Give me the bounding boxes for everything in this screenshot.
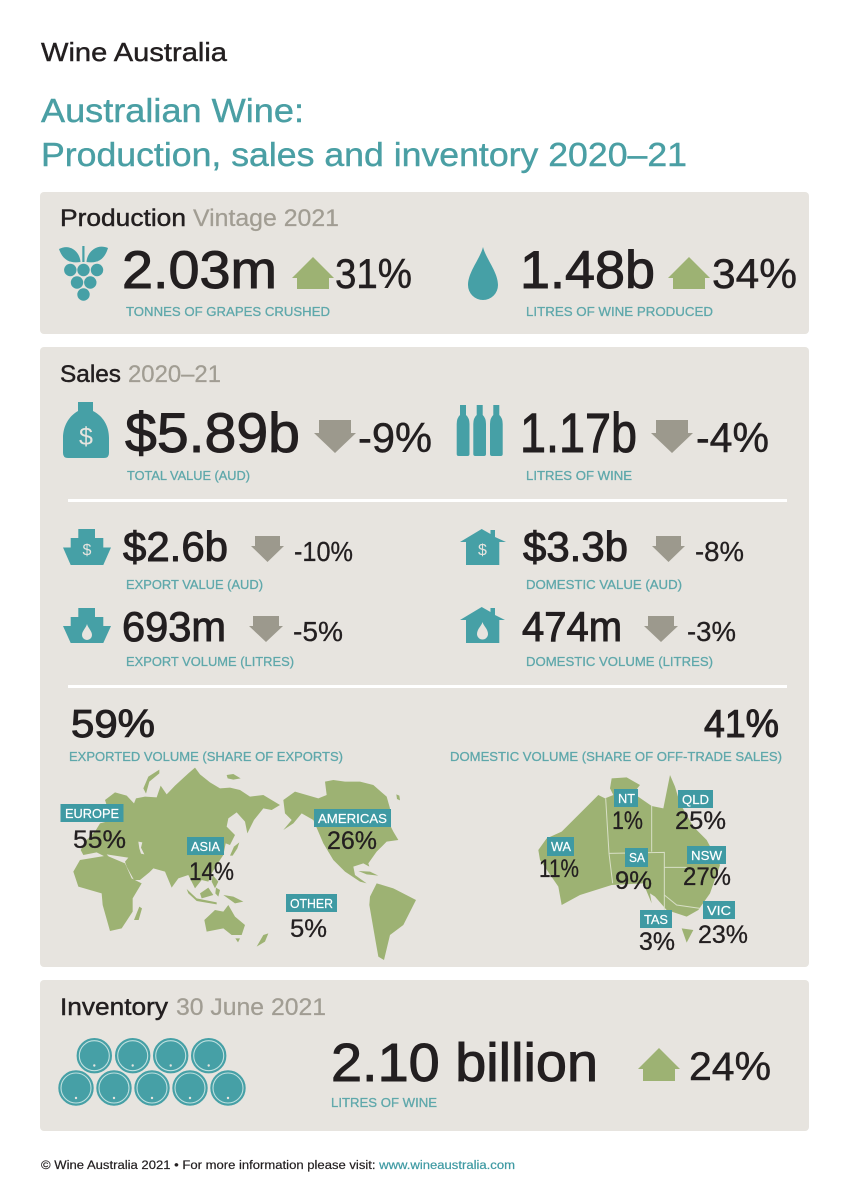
- stat: exported share: 59%: [71, 703, 155, 746]
- label: NT: 1%: [612, 807, 643, 835]
- stat: domestic value: [523, 523, 744, 592]
- sales heading: [60, 361, 221, 388]
- icon: house with drop: [460, 607, 505, 643]
- stat: domestic volume: 474m: [522, 603, 622, 650]
- label: Europe: [60, 804, 126, 854]
- stat: inventory litres: LITRES OF WINE: [331, 1095, 437, 1110]
- icon: money bag: $: [79, 423, 93, 451]
- icon: ship with dollar: $: [83, 542, 92, 559]
- inventory heading: 30 June 2021: [176, 994, 326, 1021]
- label: TAS: [639, 910, 675, 956]
- stat: litres of wine: 1.17b: [520, 401, 637, 464]
- icon: grapes: [59, 246, 108, 301]
- production heading: Vintage 2021: [193, 205, 339, 232]
- arrow down: [651, 420, 693, 453]
- stat: litres of wine: LITRES OF WINE: [526, 468, 632, 483]
- world map: [73, 768, 416, 960]
- label: Asia: ASIA: [191, 839, 220, 854]
- stat: litres of wine produced: LITRES OF WINE PRODUCED: [526, 304, 713, 319]
- label: Other: 5%: [290, 915, 327, 943]
- stat: total value: [125, 401, 432, 483]
- icon: ship with drop: [63, 608, 111, 643]
- label: WA: 11%: [539, 855, 579, 883]
- stat: total value: -9%: [358, 414, 432, 461]
- label: Europe: 55%: [73, 826, 126, 854]
- stat: export volume: 693m: [122, 603, 226, 650]
- icon: barrels: [59, 1038, 245, 1105]
- label: Americas: AMERICAS: [318, 811, 387, 826]
- arrow down: [314, 420, 356, 453]
- label: VIC: 23%: [698, 921, 748, 949]
- sales heading: 2020–21: [128, 361, 221, 388]
- arrow down: [644, 616, 678, 642]
- stat: litres of wine produced: [520, 241, 797, 319]
- stat: tonnes of grapes crushed: TONNES OF GRAPES CRUSHED: [126, 304, 330, 319]
- title: Production, sales and inventory 2020–21: [41, 136, 687, 173]
- label: QLD: QLD: [682, 792, 709, 807]
- label: NSW: [683, 846, 731, 891]
- label: NT: [612, 789, 643, 835]
- inventory heading: Inventory: [60, 994, 168, 1021]
- stat: tonnes of grapes crushed: 31%: [335, 250, 412, 297]
- stat: domestic share: 41%: [704, 703, 779, 746]
- production heading: [60, 205, 339, 232]
- label: Americas: 26%: [327, 827, 377, 855]
- label: SA: SA: [629, 850, 645, 865]
- panel: inventory: [40, 980, 809, 1131]
- stat: litres of wine: [520, 401, 769, 483]
- arrow down: [249, 616, 283, 642]
- stat: domestic volume: [522, 603, 736, 669]
- stat: domestic volume: -3%: [687, 616, 736, 647]
- sales heading: Sales: [60, 361, 121, 388]
- stat: domestic value: $3.3b: [523, 523, 628, 570]
- label: WA: [539, 837, 579, 883]
- stat: domestic value: -8%: [695, 536, 744, 567]
- stat: tonnes of grapes crushed: [122, 241, 412, 319]
- label: NSW: NSW: [691, 848, 723, 863]
- arrow up: [638, 1048, 680, 1081]
- stat: export value: -10%: [294, 536, 353, 567]
- label: Other: [286, 894, 337, 943]
- stat: domestic volume: DOMESTIC VOLUME (LITRES): [526, 654, 713, 669]
- icon: money bag: [63, 402, 109, 458]
- label: SA: 9%: [615, 867, 652, 895]
- label: TAS: 3%: [639, 928, 675, 956]
- label: VIC: VIC: [707, 903, 731, 918]
- Australia map: [538, 775, 720, 943]
- stat: export volume: EXPORT VOLUME (LITRES): [126, 654, 294, 669]
- production heading: Production: [60, 205, 186, 232]
- label: Asia: 14%: [189, 858, 234, 886]
- stat: export value: EXPORT VALUE (AUD): [126, 577, 263, 592]
- arrow up: [668, 257, 710, 289]
- stat: exported share: EXPORTED VOLUME (SHARE OF EXPORTS): [69, 749, 343, 764]
- stat: inventory litres: 2.10 billion: [331, 1033, 598, 1093]
- stat: litres of wine: -4%: [696, 414, 769, 461]
- icon: house with dollar: [460, 529, 506, 565]
- icon: house with dollar: $: [478, 542, 487, 559]
- inventory change: 24%: [689, 1045, 771, 1089]
- arrow down: [652, 536, 685, 562]
- stat: domestic share: DOMESTIC VOLUME (SHARE OF OFF-TRADE SALES): [450, 749, 782, 764]
- stat: total value: $5.89b: [125, 401, 300, 464]
- label: Europe: EUROPE: [65, 806, 119, 821]
- arrow up: [292, 257, 334, 289]
- stat: litres of wine produced: 34%: [712, 250, 797, 297]
- title: [41, 92, 687, 173]
- stat: total value: TOTAL VALUE (AUD): [127, 468, 250, 483]
- stat: litres of wine produced: 1.48b: [520, 241, 655, 300]
- stat: export value: [123, 523, 353, 592]
- label: SA: [615, 848, 652, 895]
- label: Other: OTHER: [290, 896, 333, 911]
- label: VIC: [698, 901, 748, 949]
- stat: domestic value: DOMESTIC VALUE (AUD): [526, 577, 682, 592]
- stat: exported share: [69, 703, 343, 764]
- label: NSW: 27%: [683, 863, 731, 891]
- title: Australian Wine:: [41, 92, 304, 129]
- inventory heading: [60, 994, 326, 1021]
- label: NT: NT: [618, 791, 635, 806]
- stat: tonnes of grapes crushed: 2.03m: [122, 241, 277, 300]
- stat: export volume: [122, 603, 343, 669]
- footer: © Wine Australia 2021 • For more information please visit: www.wineaustralia.com: [41, 1160, 515, 1172]
- panel: sales: [40, 347, 809, 967]
- label: WA: WA: [551, 839, 571, 854]
- arrow down: [251, 536, 284, 562]
- icon: ship with dollar: [63, 529, 111, 565]
- label: TAS: TAS: [644, 912, 668, 927]
- stat: domestic share: [450, 703, 782, 764]
- label: QLD: [675, 790, 726, 835]
- stat: export value: $2.6b: [123, 523, 228, 570]
- panel: production: [40, 192, 809, 334]
- Americas, offset to the right-hand crop: [283, 780, 416, 960]
- stat: export volume: -5%: [293, 616, 343, 647]
- logo wordmark: Wine Australia: [41, 37, 228, 67]
- label: Americas: [314, 809, 391, 855]
- label: Asia: [187, 837, 234, 886]
- icon: wine drop: [468, 247, 498, 300]
- label: QLD: 25%: [675, 807, 726, 835]
- icon: wine bottles: [457, 405, 503, 456]
